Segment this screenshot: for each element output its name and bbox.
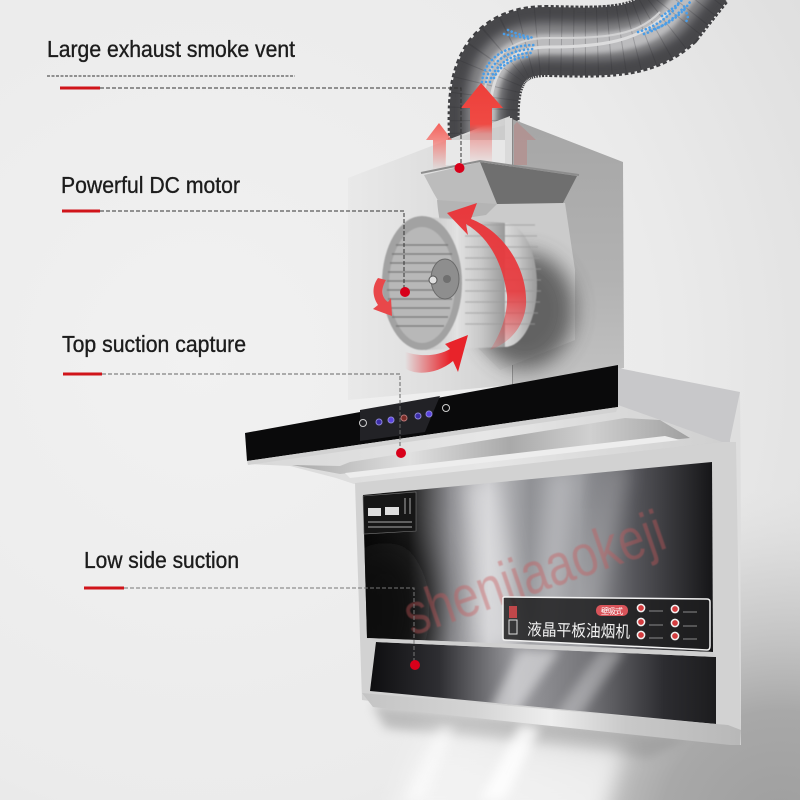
lower hood panel <box>340 442 741 745</box>
wall back plate <box>600 368 741 745</box>
watermark: shenjiaaokeji <box>395 498 673 648</box>
red rotation arrows <box>373 203 526 373</box>
bottom arrow <box>400 335 468 373</box>
callout: large exhaust smoke vent <box>47 36 464 173</box>
hood underside <box>248 405 722 484</box>
exhaust duct <box>482 0 700 145</box>
silver frame <box>355 442 741 745</box>
upper glass panel <box>363 462 713 652</box>
callout: low side suction <box>84 547 420 670</box>
funnel dark face <box>480 162 577 204</box>
black control strip <box>245 365 618 465</box>
spec plate <box>363 492 416 534</box>
smoke below hood <box>372 704 690 800</box>
fan outer rim <box>382 216 462 350</box>
blower funnel <box>421 161 579 370</box>
housing front face <box>348 116 512 400</box>
blower body <box>470 200 575 370</box>
housing inner box <box>445 125 506 165</box>
lower glass panel <box>370 642 716 724</box>
translucent housing <box>348 116 624 400</box>
red pill label <box>596 605 628 616</box>
product badge: 壁吸式 <box>601 606 623 616</box>
badge side tab <box>509 606 517 618</box>
wall shading bottom right <box>440 480 800 800</box>
silver trim <box>247 407 618 465</box>
left arrow <box>373 278 392 316</box>
product name: 液晶平板油烟机 <box>527 620 631 642</box>
housing side face <box>512 119 624 385</box>
callout: powerful DC motor: Powerful DC motor <box>61 172 240 198</box>
callout: top suction capture <box>62 331 406 458</box>
plate side shade <box>730 392 741 745</box>
recess light band <box>345 436 680 478</box>
feature icons <box>637 604 679 640</box>
fan hub <box>431 259 459 299</box>
fan inner cavity <box>389 227 455 343</box>
fan wheel <box>382 216 541 350</box>
product badge <box>503 597 710 650</box>
bottom lip <box>362 693 741 745</box>
top sweeping arrow <box>447 203 526 350</box>
callout: top suction capture: Top suction capture <box>62 331 246 357</box>
panel divider <box>368 638 716 657</box>
touch buttons <box>360 404 450 426</box>
glass highlight <box>360 396 440 441</box>
blue air dots, lower bend <box>482 0 690 82</box>
callout: large exhaust smoke vent: Large exhaust smoke vent <box>47 36 296 62</box>
housing inner fold <box>505 118 512 166</box>
upward airflow arrows <box>426 83 536 170</box>
callout: low side suction: Low side suction <box>84 547 239 573</box>
funnel light face <box>424 162 497 204</box>
suction recess <box>292 418 690 474</box>
callout: powerful DC motor <box>61 172 410 297</box>
